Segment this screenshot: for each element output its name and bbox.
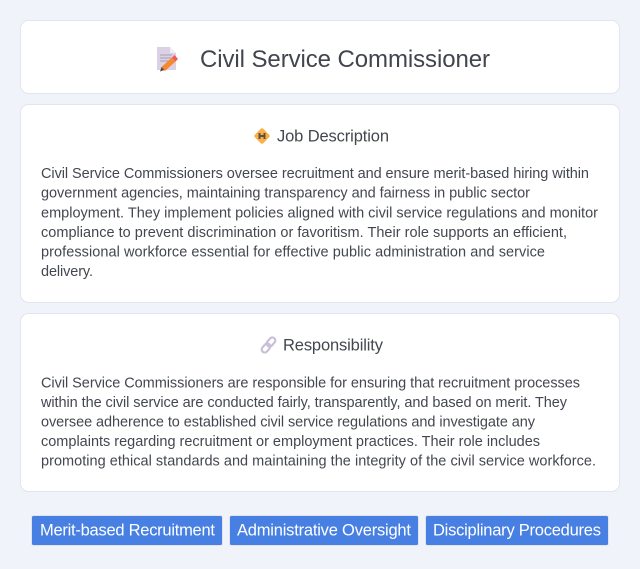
panel: job description: [20, 104, 620, 302]
tag: administrative oversight: [230, 516, 418, 546]
heading: responsibility: Responsibility: [283, 336, 384, 354]
icon: chain link: [260, 336, 277, 354]
tag: disciplinary procedures: [426, 516, 608, 546]
tag: merit-based recruitment: [32, 516, 222, 546]
text block: responsibility: promoting ethical standards and maintaining the integrity of the civil service workforce.: [41, 454, 596, 470]
title: Civil Service Commissioner: [200, 46, 490, 73]
panel: title card: [20, 20, 620, 94]
text block: job description: employment. They implement policies aligned with civil service regulations and monitor: [41, 206, 598, 222]
text block: responsibility: complaints regarding recruitment or employment practices. Their role includes: [41, 434, 540, 450]
text block: responsibility: [40, 376, 596, 470]
icon: diamond sign: [254, 128, 270, 144]
panel: responsibility: [20, 314, 620, 492]
text block: job description: Civil Service Commissioners oversee recruitment and ensure merit-based hiring within: [41, 166, 589, 182]
text block: responsibility: Civil Service Commissioners are responsible for ensuring that recruitment processes: [41, 376, 580, 392]
text block: responsibility: oversee adherence to established civil service regulations and investigate any: [41, 414, 536, 430]
icon: document with pencil: [157, 47, 178, 72]
text block: job description: [41, 166, 598, 280]
tag: merit-based recruitment: Merit-based Recruitment: [40, 522, 215, 540]
text block: responsibility: within the civil service are conducted fairly, transparently, and based on merit. They: [40, 395, 568, 411]
text block: job description: delivery.: [41, 264, 93, 280]
tag: disciplinary procedures: Disciplinary Procedures: [433, 522, 601, 540]
text block: job description: government agencies, maintaining transparency and fairness in public sector: [41, 186, 530, 202]
heading: job description: Job Description: [277, 128, 389, 146]
tag: administrative oversight: Administrative Oversight: [237, 522, 411, 540]
text block: job description: compliance to prevent discrimination or favoritism. Their role supports an efficient,: [41, 225, 567, 241]
text block: job description: professional workforce essential for effective public administration and service: [41, 244, 545, 260]
